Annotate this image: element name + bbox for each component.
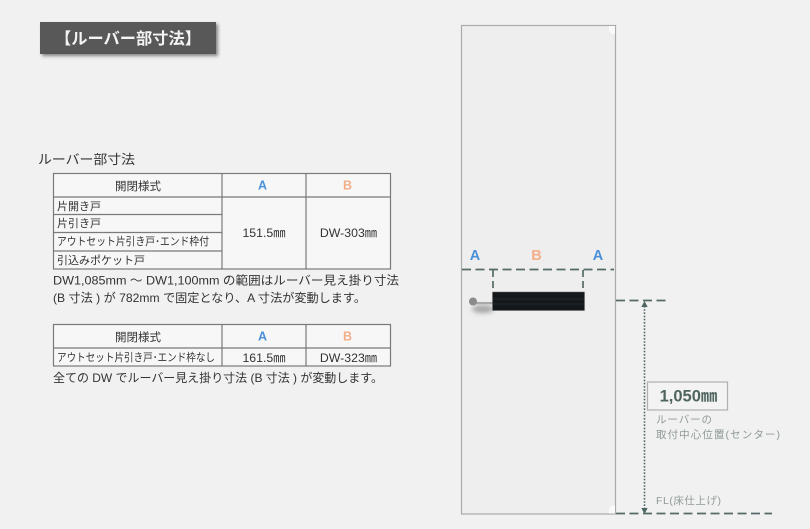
dimension value	[648, 382, 728, 410]
height arrow	[641, 301, 648, 514]
table: outset without end frame: A	[258, 330, 267, 344]
table: louver dimensions: A	[258, 178, 267, 192]
door hinge bottom	[609, 506, 615, 514]
table: outset without end frame: アウトセット片引き戸･エンド枠なし	[57, 350, 215, 364]
dimension caption	[656, 414, 780, 441]
dimension caption: 取付中心位置(センター)	[656, 428, 780, 441]
door hinge top	[609, 26, 615, 34]
label A left: A	[470, 248, 481, 264]
table: louver dimensions: 片引き戸	[57, 216, 101, 230]
door	[462, 26, 616, 514]
floor line	[616, 512, 772, 514]
dimension value: 1,050㎜	[660, 388, 718, 406]
table: louver dimensions: アウトセット片引き戸･エンド枠付	[57, 234, 209, 248]
table: louver dimensions: 151.5㎜	[242, 226, 286, 240]
door handle	[469, 298, 498, 313]
note: all DW sizes: 全ての DW でルーバー見え掛り寸法 (B 寸法 ) が変動します。	[53, 370, 383, 385]
table: louver dimensions: DW-303㎜	[320, 226, 377, 240]
table: louver dimensions	[54, 174, 390, 269]
centre line leader	[616, 300, 668, 302]
table: outset without end frame	[54, 324, 390, 366]
dimension caption: ルーバーの	[656, 414, 712, 426]
title	[40, 22, 216, 54]
table: louver dimensions: B	[343, 178, 352, 192]
table: outset without end frame: 開閉様式	[115, 330, 161, 344]
table: louver dimensions: 引込みポケット戸	[57, 253, 145, 267]
note: fixed B dimension range: DW1,085mm ～ DW1,100mm の範囲はルーバー見え掛り寸法	[53, 272, 399, 288]
label A right: A	[593, 248, 604, 264]
louver	[492, 292, 584, 310]
table: outset without end frame: DW-323㎜	[320, 351, 377, 365]
table: outset without end frame: B	[343, 330, 352, 344]
title: 【ルーバー部寸法】	[55, 29, 201, 48]
floor label: FL(床仕上げ)	[656, 494, 721, 507]
note: fixed B dimension range	[53, 272, 399, 305]
table: outset without end frame: 161.5㎜	[242, 351, 286, 365]
table: louver dimensions: 開閉様式	[115, 179, 161, 193]
section heading: ルーバー部寸法	[38, 152, 135, 167]
note: fixed B dimension range: (B 寸法 ) が 782mm で固定となり、A 寸法が変動します。	[53, 290, 366, 305]
label B: B	[531, 248, 542, 264]
dimension lines A B A	[462, 270, 614, 288]
table: louver dimensions: 片開き戸	[57, 200, 101, 213]
